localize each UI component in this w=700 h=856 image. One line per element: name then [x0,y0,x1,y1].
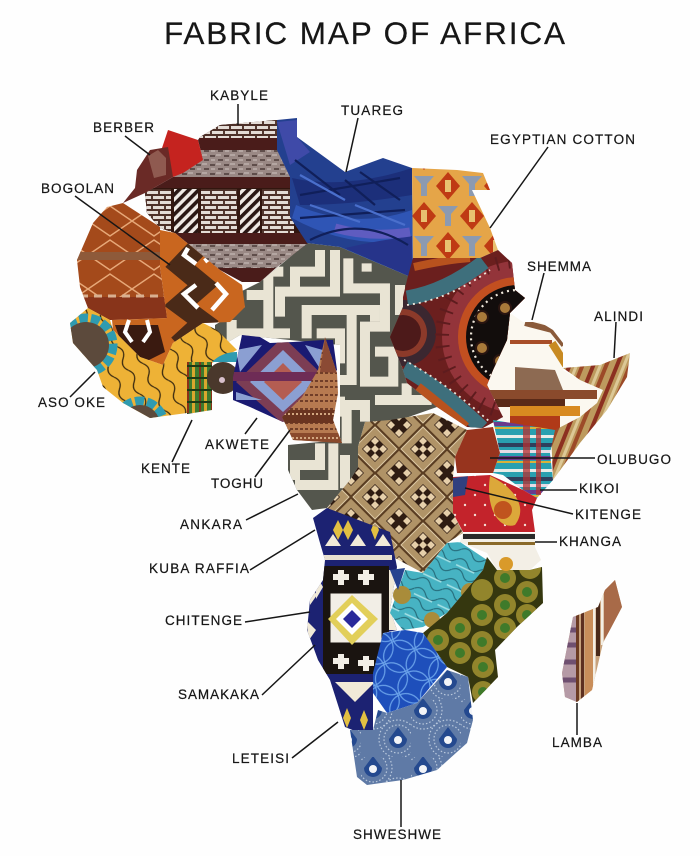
region: Chitenge [307,508,397,730]
title: FABRIC MAP OF AFRICA [164,15,565,51]
label: Akwete: AKWETE [205,437,269,452]
label: Leteisi [232,722,338,766]
label: Kuba Raffia [149,530,315,576]
label: Kabyle [210,88,268,125]
label: Olubugo: OLUBUGO [597,452,671,467]
region: Shemma white with bands [488,313,602,430]
label: Ankara: ANKARA [180,517,242,532]
region: Toghu [282,337,342,443]
label: Chitenge [165,612,310,628]
map of Africa [59,115,630,785]
label: Kitenge: KITENGE [575,507,641,522]
label: Bogolan [41,181,170,265]
label: Bogolan: BOGOLAN [41,181,114,196]
label: Kuba Raffia: KUBA RAFFIA [149,561,249,576]
region: Kente [187,352,239,414]
label: Tuareg: TUAREG [341,103,403,118]
label: Khanga: KHANGA [559,534,621,549]
label: Berber [93,120,154,155]
region: Bogolan left panel [77,203,167,320]
label: Kabyle: KABYLE [210,88,268,103]
region: Kuba raffia diamonds [323,413,467,573]
label: Kikoi [540,481,619,496]
label: Leteisi: LETEISI [232,751,289,766]
label: Egyptian Cotton: EGYPTIAN COTTON [490,132,635,147]
label: Kente: KENTE [141,461,190,476]
label: Shweshwe: SHWESHWE [353,827,441,842]
region: Alindi stripes [551,353,630,480]
label: Toghu: TOGHU [211,476,263,491]
region: Akwete [233,335,337,422]
label: Ankara [180,494,298,532]
label: Egyptian Cotton [490,132,635,228]
region: Bogolan orange panel [112,230,245,365]
label: Kitenge [465,488,641,522]
region: Ankara maze fabric [215,243,437,510]
label: Shemma: SHEMMA [527,259,591,274]
label: Chitenge: CHITENGE [165,613,242,628]
region: Berber red and brown [123,130,203,203]
region: Tuareg indigo [277,118,413,278]
label: Lamba [552,703,602,750]
label: Aso Oke: ASO OKE [38,395,105,410]
region: Kabyle woven bands [145,120,308,282]
label: Kikoi: KIKOI [579,481,619,496]
label: Alindi: ALINDI [594,309,643,324]
label: Shweshwe [353,780,441,842]
label: Aso Oke [38,372,105,410]
region: Olubugo [455,420,555,498]
region: Teal fabric [390,542,487,630]
label: Shemma [527,259,591,320]
region: Khanga [460,533,541,571]
label: Akwete [205,418,269,452]
region: Shweshwe [350,670,473,785]
region: Kitenge [453,475,537,532]
region: Olive circles [423,557,543,703]
Madagascar: Lamba [562,580,622,702]
label: Samakaka [178,645,315,702]
region: Blue circles [373,630,447,713]
label: Kente [141,420,192,476]
label: Samakaka: SAMAKAKA [178,687,259,702]
label: Alindi [594,309,643,358]
label: Tuareg [341,103,403,172]
label: Berber: BERBER [93,120,154,135]
label: Lamba: LAMBA [552,735,602,750]
label: Toghu [211,430,290,491]
region: Egyptian cotton [412,168,498,258]
region: Sudan maroon arcs [390,250,525,428]
region: Aso Oke yellow [70,308,237,418]
labels with leader lines [38,88,671,842]
